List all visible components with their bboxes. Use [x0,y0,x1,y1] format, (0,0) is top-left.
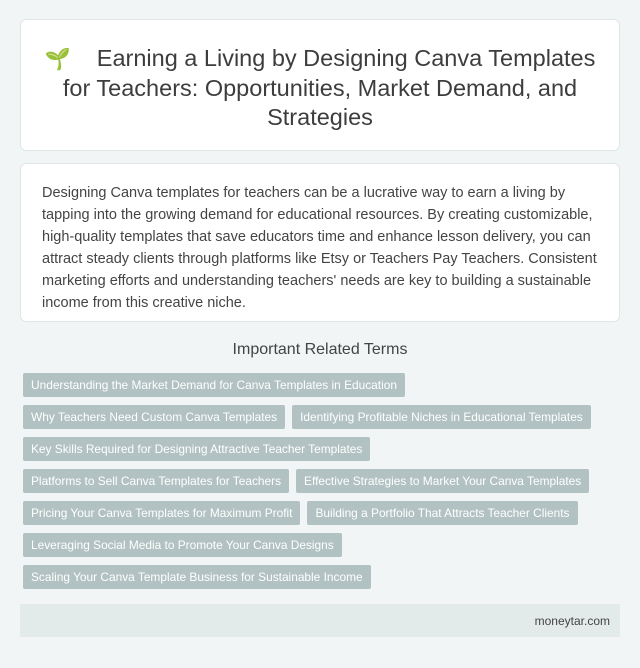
tag row 6: Leveraging Social Media to Promote Your Canva Designs [31,538,334,552]
related terms heading: Important Related Terms [233,341,407,358]
tag row 5: Pricing Your Canva Templates for Maximum Profit [31,506,292,520]
intro text card [20,163,620,322]
title: for Teachers: Opportunities, Market Demand, and [63,75,577,101]
footer [20,604,620,637]
tag row 7: Scaling Your Canva Template Business for Sustainable Income [31,570,363,584]
title: Strategies [267,104,373,130]
tag row 5 [23,501,578,525]
footer source: moneytar.com [535,614,610,628]
tag row 2: Why Teachers Need Custom Canva Templates [31,410,277,424]
tag row 3: Key Skills Required for Designing Attractive Teacher Templates [31,442,362,456]
tag row 4 [23,469,589,493]
tag row 2 [23,405,591,429]
tag row 2: Identifying Profitable Niches in Educational Templates [300,410,583,424]
title card [20,19,620,151]
intro paragraph: Designing Canva templates for teachers can be a lucrative way to earn a living by tapping into the growing demand for educational resources. By creating customizable, high-quality templates that save educators time and enhance lesson delivery, you can attract steady clients through platforms like Etsy or Teachers Pay Teachers. Consistent marketing efforts and understanding teachers' needs are key to building a sustainable income from this creative niche. [42,185,597,311]
tag row 5: Building a Portfolio That Attracts Teacher Clients [315,506,570,520]
tag row 1: Understanding the Market Demand for Canva Templates in Education [31,378,397,392]
tag row 4: Effective Strategies to Market Your Canva Templates [304,474,581,488]
title [45,45,595,130]
tag row 4: Platforms to Sell Canva Templates for Teachers [31,474,281,488]
title: 🌱 Earning a Living by Designing Canva Templates [45,45,595,71]
